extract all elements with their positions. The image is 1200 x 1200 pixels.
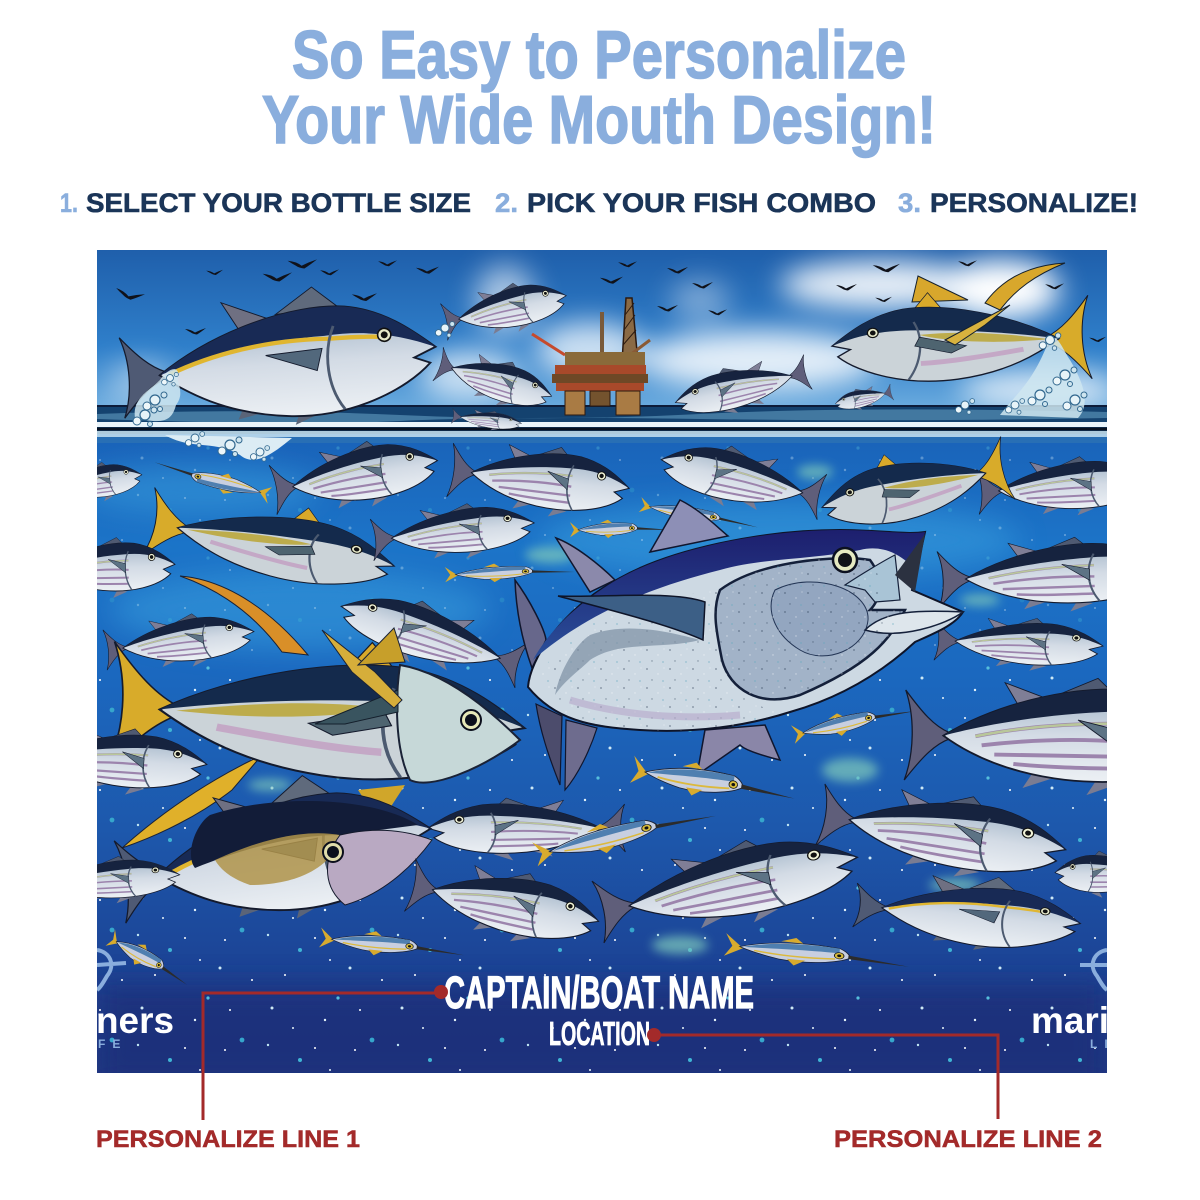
- sea surface: [97, 405, 1107, 460]
- fish above water: [117, 263, 1092, 437]
- fish left crop: [97, 728, 208, 794]
- sky with clouds: [97, 250, 1120, 410]
- steps heading: [60, 188, 1138, 218]
- steps heading: 2.: [495, 188, 518, 218]
- label: personalize line 1: PERSONALIZE LINE 1: [96, 1126, 360, 1153]
- tuna under yellowfin: [427, 796, 626, 862]
- splashes: [133, 322, 1087, 461]
- yellow dorsal fin: [912, 276, 968, 302]
- steps heading: 3.: [898, 188, 921, 218]
- personalized name text: [444, 967, 754, 1052]
- birds: [114, 259, 1106, 342]
- body: [528, 530, 963, 731]
- small fish: [835, 384, 894, 410]
- yellow pectoral fin: [945, 305, 1010, 345]
- big yellowfin tuna: [105, 576, 530, 848]
- yellowfin leaping right: [830, 292, 1093, 382]
- callout line 1: [203, 985, 448, 1120]
- fish left edge: [97, 462, 142, 502]
- jumping skipjack right: [674, 354, 812, 413]
- dark yellowfin lower left: [114, 775, 432, 924]
- underwater gradient: [80, 430, 1107, 1085]
- fish row 3: [102, 614, 255, 670]
- logo left: [96, 950, 174, 1051]
- personalized name text: CAPTAIN/BOAT NAME: [444, 967, 754, 1018]
- logo right: mari: [1031, 1000, 1109, 1041]
- logo right: LI: [1090, 1037, 1115, 1051]
- big bluefin tuna: [515, 500, 963, 790]
- head: [716, 558, 905, 699]
- flying fish: [440, 282, 567, 340]
- steps heading: SELECT YOUR BOTTLE SIZE: [86, 188, 471, 218]
- stripe fish: [816, 784, 1067, 876]
- logo left: ners: [96, 1000, 174, 1041]
- panel: fish artwork: [97, 250, 1107, 1073]
- large stripe fish right: [904, 678, 1107, 795]
- title: [262, 17, 936, 158]
- yellow sickle fin: [985, 263, 1065, 310]
- logo right: [1031, 950, 1115, 1051]
- oil rig: [532, 298, 650, 415]
- fish school upper: [29, 428, 1169, 694]
- fish row 1: [268, 441, 438, 515]
- bluefin leaping left: [118, 286, 438, 425]
- logo left: FE: [98, 1037, 127, 1051]
- anal fin: [122, 755, 262, 848]
- fish center-bottom: [403, 850, 605, 958]
- surface fish: [450, 408, 522, 430]
- fins: [556, 538, 615, 592]
- steps heading: 1.: [60, 188, 78, 218]
- pectoral fin: [558, 595, 705, 640]
- fish lower: [97, 678, 1107, 984]
- title: So Easy to Personalize: [292, 17, 906, 93]
- callout line 2: [647, 1028, 998, 1119]
- label: personalize line 2: PERSONALIZE LINE 2: [834, 1126, 1102, 1153]
- personalized name text: LOCATION: [549, 1015, 650, 1052]
- jumping fish: [432, 347, 552, 406]
- fish row 2: [147, 487, 396, 585]
- long yellow fin: [180, 576, 308, 655]
- title: Your Wide Mouth Design!: [262, 82, 936, 158]
- eye: [833, 548, 857, 572]
- steps heading: PERSONALIZE!: [930, 188, 1138, 218]
- speckles: [540, 558, 905, 731]
- steps heading: PICK YOUR FISH COMBO: [527, 188, 876, 218]
- small thin fish: [791, 712, 910, 744]
